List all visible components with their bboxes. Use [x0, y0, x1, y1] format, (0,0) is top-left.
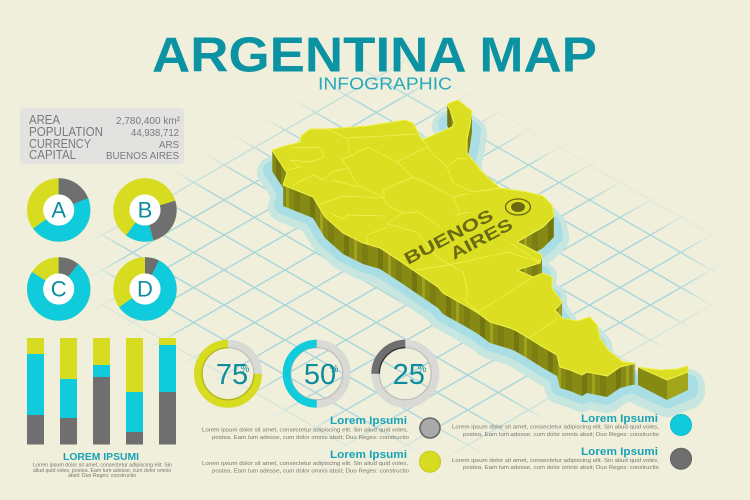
donut chart A	[35, 186, 82, 234]
bar chart caption: LOREM IPSUMI	[63, 452, 139, 463]
legend text: dark grey: Lorem ipsum dolor sit amet, consectetur adipiscing elit. Sin aliud quid voles,	[452, 458, 659, 464]
map top surface	[272, 100, 636, 376]
panel: country facts: BUENOS AIRES	[106, 150, 179, 162]
map island	[638, 366, 688, 400]
legend text: cyan: postea. Eam tum adesse, cum dolor omnis absit; Duo Reges: constructio	[463, 432, 659, 438]
donut chart A: A	[51, 198, 66, 222]
legend dot: cyan	[670, 414, 692, 436]
donut chart C: C	[51, 276, 67, 302]
map label: Buenos Aires: AIRES	[447, 215, 516, 264]
island left face	[638, 367, 667, 400]
legend text: cyan: Lorem Ipsumi	[581, 413, 658, 425]
legend text: yellow: Lorem Ipsumi	[330, 449, 407, 461]
panel: country facts: 2,780,400 km²	[116, 115, 180, 127]
legend text: yellow	[202, 449, 409, 474]
progress ring 75%: %	[241, 364, 250, 375]
legend dot: grey	[420, 418, 440, 438]
isometric grid	[92, 62, 716, 456]
progress ring 50%: %	[330, 364, 339, 375]
progress ring 75%: 75	[216, 359, 248, 391]
subtitle: INFOGRAPHIC	[318, 74, 452, 94]
progress ring 25%: 25	[393, 359, 425, 391]
progress ring 75%	[198, 344, 258, 404]
donut chart B: B	[138, 198, 152, 222]
legend dot: dark grey	[670, 448, 692, 469]
legend text: grey: postea. Eam tum adesse, cum dolor omnis absit; Duo Reges: constructio	[212, 435, 409, 441]
legend text: cyan	[452, 413, 659, 438]
donut chart B	[121, 186, 169, 234]
progress ring 25%: %	[418, 364, 427, 375]
progress ring 50%: 50	[304, 359, 336, 391]
legend text: grey: Lorem ipsum dolor sit amet, consectetur adipiscing elit. Sin aliud quid voles,	[202, 428, 408, 434]
map label: Buenos Aires	[401, 206, 516, 269]
legend text: dark grey: postea. Eam tum adesse, cum dolor omnis absit; Duo Reges: constructio	[463, 465, 659, 471]
province borders	[287, 128, 558, 337]
panel: country facts: ARS	[159, 139, 179, 151]
panel: country facts	[20, 108, 184, 164]
panel: country facts: POPULATION	[29, 124, 103, 139]
panel: country facts: CURRENCY	[29, 136, 91, 151]
progress ring 50%	[287, 344, 347, 404]
donut chart C	[35, 265, 82, 313]
donut chart D: D	[137, 276, 153, 302]
island right face	[667, 372, 688, 400]
map of Argentina	[272, 100, 636, 397]
map label: Buenos Aires: BUENOS	[401, 206, 496, 269]
legend text: yellow: postea. Eam tum adesse, cum dolor omnis absit; Duo Reges: constructio	[212, 468, 409, 474]
legend text: grey	[202, 415, 409, 441]
legend text: dark grey: Lorem Ipsumi	[581, 446, 658, 458]
panel: country facts: AREA	[29, 112, 60, 127]
island top	[638, 366, 688, 380]
panel: country facts: 44,938,712	[131, 127, 179, 139]
capital marker	[506, 199, 530, 215]
donut chart D	[121, 265, 169, 313]
progress ring 25%	[375, 344, 435, 404]
legend text: yellow: Lorem ipsum dolor sit amet, consectetur adipiscing elit. Sin aliud quid voles,	[202, 461, 408, 467]
bar chart caption	[33, 452, 172, 479]
map extrusion	[272, 101, 636, 397]
panel: country facts: CAPITAL	[29, 147, 76, 162]
bar chart caption: Lorem ipsum dolor sit amet, consectetur adipiscing elit. Sin	[33, 462, 172, 468]
title: ARGENTINA MAP	[152, 29, 597, 83]
legend text: grey: Lorem Ipsumi	[330, 415, 407, 427]
bar chart caption: allud quid voles, postea. Eam tum adesse, cum dolor omnis	[33, 468, 171, 474]
legend text: dark grey	[452, 446, 659, 471]
legend dot: yellow	[420, 451, 440, 472]
legend text: cyan: Lorem ipsum dolor sit amet, consectetur adipiscing elit. Sin aliud quid voles,	[452, 424, 659, 430]
stacked bar chart	[27, 338, 176, 444]
bar chart caption: absit: Duo Reges: constructio	[68, 473, 136, 479]
map water halo	[272, 120, 688, 400]
